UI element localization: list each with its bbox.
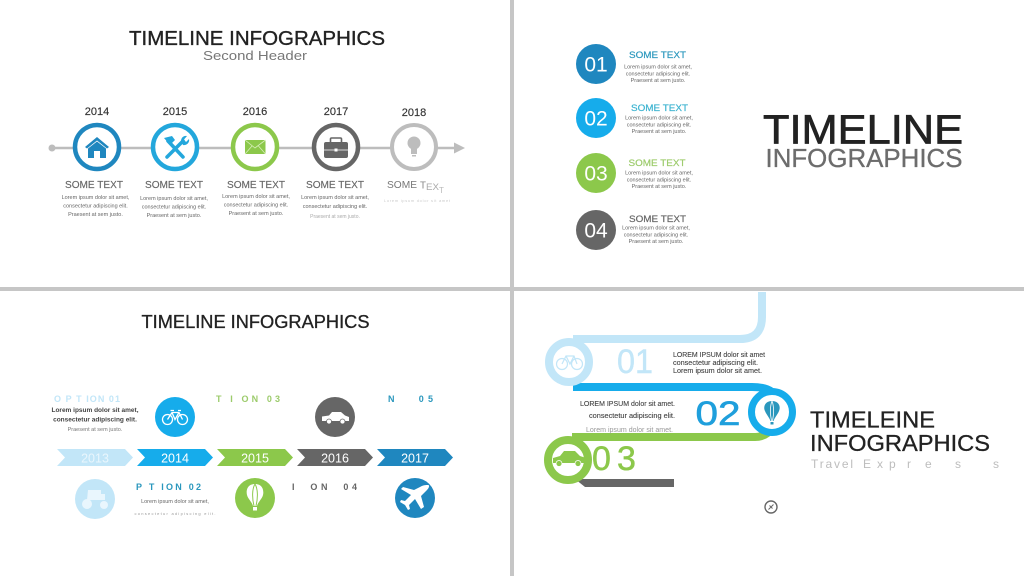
- number 02: 02: [696, 395, 740, 433]
- road: green: [572, 428, 772, 437]
- item 04: Lorem ipsum dolor sit amet,: [622, 226, 690, 232]
- item 01: Lorem ipsum dolor sit amet,: [624, 64, 692, 70]
- subheading: r: [907, 457, 911, 471]
- chevron 2016: 2016: [321, 452, 349, 466]
- chevron 2017: [377, 449, 453, 466]
- option 04 label: I ON 04: [292, 482, 357, 492]
- icon: light bulb: [392, 125, 436, 169]
- icon: balloon node: [752, 392, 792, 432]
- item 04: [576, 210, 690, 250]
- option 01 text: consectetur adipiscing elit.: [53, 416, 137, 424]
- item 03: consectetur adipiscing elit.: [627, 178, 692, 184]
- option 01 text: O P T ION 01: [54, 394, 120, 404]
- item 01: [576, 44, 692, 84]
- heading: INFOGRAPHICS: [810, 430, 990, 456]
- text block: 2015: Lorem ipsum dolor sit amet,: [140, 196, 208, 202]
- icon: house: [75, 125, 119, 169]
- text block: 2016: SOME TEXT: [227, 179, 286, 191]
- text: item 1: [673, 350, 766, 375]
- item 01: 01: [584, 54, 608, 76]
- text block: 2018: T: [420, 180, 427, 192]
- text: item 1: Lorem ipsum dolor sit amet.: [673, 366, 762, 375]
- option 02 text: [134, 482, 216, 516]
- heading: TIMELEINE: [810, 406, 935, 432]
- text block: 2016: consectetur adipiscing elit.: [224, 202, 289, 208]
- text block: 2017: SOME TEXT: [306, 179, 365, 191]
- chevron 2014: 2014: [161, 452, 189, 466]
- text block: 2015: consectetur adipiscing elit.: [142, 204, 207, 210]
- subheading: Travel: [811, 457, 853, 471]
- text block: 2017: Lorem ipsum dolor sit amet,: [301, 195, 369, 201]
- panel: horizontal timeline: [48, 28, 465, 220]
- year labels: [85, 106, 426, 119]
- subheading: p: [889, 457, 896, 471]
- icon: car node: [548, 440, 588, 480]
- option 02 text: Lorem ipsum dolor sit amet,: [141, 499, 209, 505]
- panel: chevron timeline: [51, 312, 453, 519]
- text block: 2014: Lorem ipsum dolor sit amet,: [62, 195, 130, 201]
- year labels: 2016: [243, 106, 267, 118]
- heading: [763, 106, 963, 173]
- chevron 2014: [137, 449, 213, 466]
- chevron 2015: [217, 449, 293, 466]
- text block: 2016: Lorem ipsum dolor sit amet,: [222, 194, 290, 200]
- panel: numbered list: [576, 44, 963, 250]
- icon: briefcase: [314, 125, 358, 169]
- item 03: [576, 153, 693, 193]
- item 02: Lorem ipsum dolor sit amet,: [625, 116, 693, 122]
- text block: 2018: [384, 179, 451, 203]
- road: gray: [575, 479, 674, 487]
- text: item 1: consectetur adipiscing elit.: [673, 358, 758, 367]
- year labels: 2015: [163, 106, 187, 118]
- icon: small plane badge: [765, 501, 777, 513]
- chevron 2016: [297, 449, 373, 466]
- panel: winding road timeline: [548, 292, 999, 513]
- text block: 2016: Praesent at sem justo.: [229, 211, 284, 217]
- text block: 2018: Lorem ipsum dolor sit amet: [384, 198, 451, 203]
- item 03: 03: [584, 162, 608, 186]
- item 04: 04: [584, 220, 608, 242]
- text: item 1: LOREM IPSUM dolor sit amet: [673, 350, 766, 359]
- item 01: consectetur adipiscing elit.: [626, 72, 691, 78]
- option 01 text: Praesent at sem justo.: [68, 427, 123, 433]
- option 01 text: Lorem ipsum dolor sit amet,: [51, 407, 139, 414]
- text block: 2017: Praesent at sem justo.: [310, 214, 360, 220]
- heading: [810, 406, 990, 456]
- title: TIMELINE INFOGRAPHICS: [142, 312, 370, 332]
- heading: INFOGRAPHICS: [766, 143, 962, 173]
- item 03: Praesent at sem justo.: [632, 184, 687, 190]
- number 03: 0: [592, 440, 611, 478]
- icon: tractor: [75, 479, 115, 519]
- text block: 2014: [62, 179, 130, 218]
- icon: tools: [153, 125, 197, 169]
- text: item 2: LOREM IPSUM dolor sit amet.: [580, 399, 675, 408]
- option 02 text: P T ION 02: [136, 482, 201, 492]
- text: item 2: [580, 399, 675, 434]
- text block: 2014: SOME TEXT: [65, 179, 124, 191]
- road: light blue: [573, 292, 762, 339]
- text block: 2017: [301, 179, 369, 220]
- item 02: consectetur adipiscing elit.: [627, 122, 692, 128]
- subheading: s: [993, 457, 999, 471]
- timeline axis arrow: [48, 142, 465, 154]
- item 02: Praesent at sem justo.: [632, 129, 687, 135]
- option 01 text: [51, 394, 139, 433]
- item 03: SOME TEXT: [628, 158, 686, 169]
- item 03: Lorem ipsum dolor sit amet,: [625, 170, 693, 176]
- text block: 2015: [140, 179, 208, 219]
- icon: bicycle: [155, 397, 195, 437]
- icon: bicycle node: [549, 342, 589, 382]
- year labels: 2017: [324, 106, 348, 118]
- subheading: E: [863, 457, 871, 471]
- title: TIMELINE INFOGRAPHICS: [129, 28, 385, 50]
- text block: 2015: SOME TEXT: [145, 179, 204, 191]
- chevron 2017: 2017: [401, 452, 429, 466]
- item 04: Praesent at sem justo.: [629, 239, 684, 245]
- subheading: x: [877, 457, 883, 471]
- text block: 2016: [222, 179, 290, 217]
- option 05 label: N 05: [388, 394, 433, 404]
- item 01: Praesent at sem justo.: [631, 78, 686, 84]
- subtitle: Second Header: [203, 48, 308, 63]
- subheading: s: [955, 457, 961, 471]
- number 03: 3: [617, 440, 636, 478]
- icon: airplane: [395, 478, 435, 518]
- chevron 2013: [57, 449, 133, 466]
- chevron 2015: 2015: [241, 452, 269, 466]
- item 04: SOME TEXT: [629, 214, 686, 225]
- option 03 label: T I ON 03: [216, 394, 280, 404]
- year labels: 2018: [402, 107, 426, 119]
- icon: balloon: [235, 478, 275, 518]
- icon: car: [315, 397, 355, 437]
- text block: 2014: Praesent at sem justo.: [68, 212, 123, 218]
- text: item 2: Lorem ipsum dolor sit amet.: [586, 425, 673, 434]
- year labels: 2014: [85, 106, 109, 118]
- text block: 2018: SOME: [387, 179, 417, 191]
- item 01: SOME TEXT: [629, 50, 686, 61]
- item 02: 02: [584, 108, 608, 130]
- text block: 2017: consectetur adipiscing elit.: [303, 204, 368, 210]
- heading: TIMELINE: [763, 106, 963, 152]
- text: item 2: consectetur adipiscing elit.: [589, 411, 675, 420]
- text block: 2014: consectetur adipiscing elit.: [63, 204, 128, 210]
- text block: 2018: EX: [426, 182, 439, 192]
- option 02 text: consectetur adipiscing elit.: [134, 511, 216, 516]
- chevron 2013: 2013: [81, 452, 109, 466]
- item 02: SOME TEXT: [631, 103, 688, 114]
- text block: 2015: Praesent at sem justo.: [147, 213, 202, 219]
- item 04: consectetur adipiscing elit.: [624, 232, 689, 238]
- icon: envelope: [233, 125, 277, 169]
- road: blue: [573, 387, 772, 392]
- text block: 2018: T: [439, 186, 444, 195]
- number 01: 01: [617, 343, 653, 381]
- item 02: [576, 98, 693, 138]
- subheading: e: [925, 457, 932, 471]
